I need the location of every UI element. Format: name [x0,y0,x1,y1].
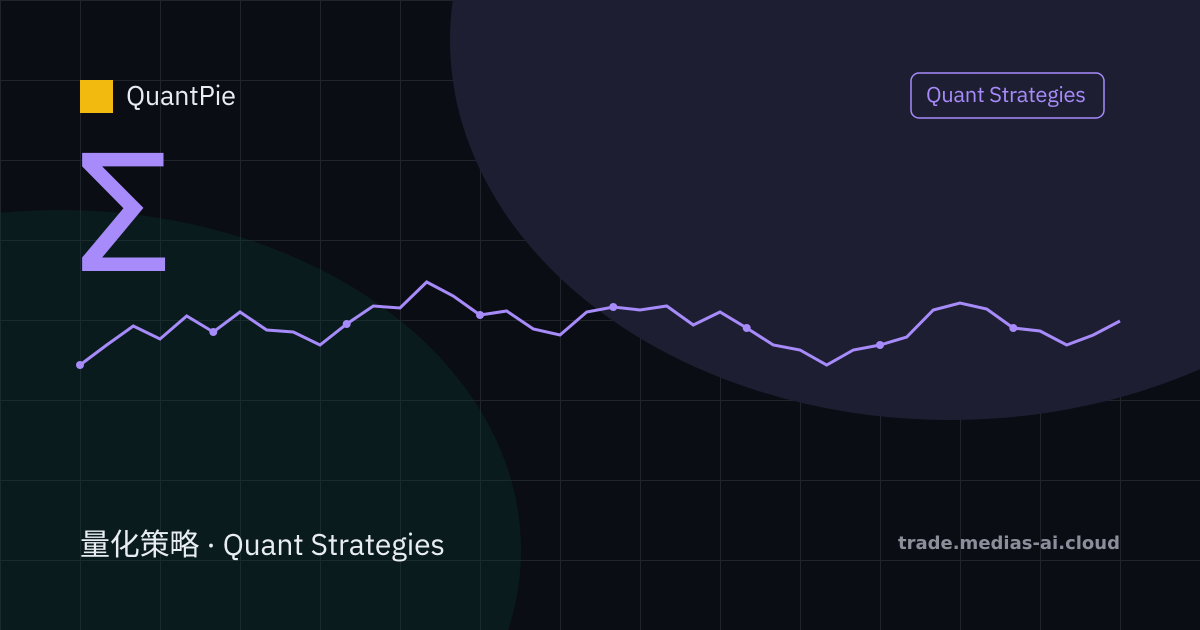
icon: sigma symbol: Σ [65,121,176,309]
icon: yellow square [80,80,113,113]
line chart [76,282,1120,369]
background ellipse: purple [450,0,1200,420]
tag badge: Quant Strategies [926,80,1086,109]
tag badge [911,73,1104,118]
subtitle: 量化策略 · Quant Strategies [80,525,445,564]
domain: trade.medias-ai.cloud [898,533,1120,554]
background ellipse: teal [0,210,521,630]
brand name: QuantPie [126,78,236,113]
brand logo [80,78,236,113]
